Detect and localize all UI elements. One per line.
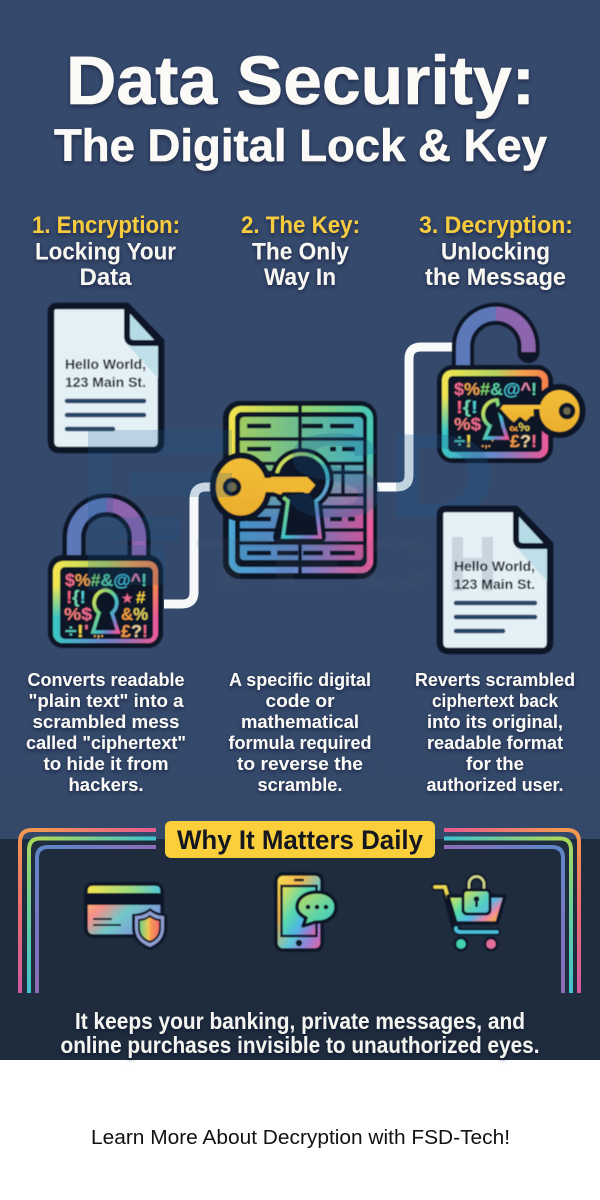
- watermark: FSD-Tech logo: [88, 409, 497, 606]
- ciphertext symbols: [64, 570, 148, 641]
- arrow: connector lock to key: [164, 487, 215, 604]
- key: [262, 475, 318, 497]
- text block: decryption description: readable format: [427, 733, 563, 753]
- panel: why it matters daily: [0, 839, 600, 1060]
- text block: decryption description: into its original,: [427, 712, 563, 732]
- ciphertext symbols: #: [136, 588, 146, 607]
- text block: key description: [228, 670, 372, 795]
- ciphertext symbols: &%: [121, 604, 148, 624]
- text block: encryption description: hackers.: [68, 775, 144, 795]
- text block: why it matters summary: [60, 1008, 540, 1058]
- heading: step 1 encryption: 1. Encryption:: [32, 212, 180, 239]
- heading: step 3 decryption: 3. Decryption:: [419, 212, 573, 239]
- text block: decryption description: [415, 670, 575, 795]
- text block: key description: formula required: [228, 733, 372, 753]
- icon: credit card with shield: [86, 884, 167, 950]
- icon: restored plain text document: Hello World,: [454, 558, 535, 574]
- text block: decryption description: Reverts scrambled: [415, 670, 575, 690]
- heading: step 3 decryption: the Message: [425, 264, 566, 291]
- text block: key description: code or: [266, 691, 334, 711]
- ciphertext symbols: $%#&@^!: [454, 379, 537, 399]
- ciphertext symbols: $%#&@^!: [65, 570, 147, 590]
- ciphertext symbols: .,.': [481, 436, 494, 450]
- ciphertext symbols: ★: [121, 591, 134, 607]
- ciphertext symbols: ÷!': [65, 621, 89, 641]
- footer call to action: Learn More About Decryption with FSD-Tech!: [91, 1127, 510, 1149]
- rainbow frame: right rails: [444, 828, 579, 993]
- text block: key description: scramble.: [258, 775, 342, 795]
- text block: key description: A specific digital: [229, 670, 371, 690]
- ciphertext symbols: %$: [454, 414, 481, 434]
- ciphertext symbols: £?!: [121, 621, 148, 641]
- heading: step 1 encryption: Data: [79, 264, 132, 291]
- watermark: FSD-Tech logo: SD: [283, 409, 497, 543]
- heading: step 3 decryption: Unlocking: [441, 238, 550, 266]
- ciphertext symbols: %$: [64, 604, 92, 624]
- heading: step 2 the key: The Only: [252, 238, 350, 266]
- icon: shopping cart with lock: [435, 877, 505, 950]
- icon: plain text document: [51, 306, 161, 450]
- rainbow frame: left rails: [20, 828, 156, 993]
- text block: decryption description: ciphertext back: [432, 691, 559, 711]
- ciphertext symbols: &%: [509, 420, 530, 434]
- heading: step 2 the key: 2. The Key:: [241, 212, 360, 239]
- title: [54, 42, 547, 171]
- grid lines of scrambled data: [240, 401, 363, 579]
- ciphertext symbols: £?!: [510, 431, 537, 451]
- icon: cipher key panel: [213, 401, 377, 579]
- text block: encryption description: to hide it from: [44, 754, 168, 774]
- text block: key description: to reverse the: [237, 754, 363, 774]
- title: Data Security:: [66, 42, 535, 119]
- heading: step 1 encryption: [32, 212, 180, 291]
- ciphertext symbols: !{!: [66, 587, 86, 607]
- title: The Digital Lock & Key: [54, 120, 547, 171]
- icon: plain text document: 123 Main St.: [65, 374, 146, 390]
- heading: step 1 encryption: Locking Your: [35, 238, 176, 266]
- watermark: FSD-Tech logo: TEC: [195, 523, 435, 606]
- ciphertext symbols: [454, 379, 537, 451]
- icon: restored plain text document: 123 Main St.: [454, 576, 535, 592]
- icon: open padlock with key: [437, 314, 582, 463]
- text block: why it matters summary: online purchases invisible to unauthorized eyes.: [60, 1032, 540, 1058]
- heading: step 2 the key: [241, 212, 360, 291]
- text block: why it matters summary: It keeps your banking, private messages, and: [75, 1008, 525, 1034]
- text block: encryption description: [26, 670, 186, 795]
- ciphertext symbols: !{!: [456, 397, 478, 417]
- ciphertext symbols: .,.': [93, 625, 107, 640]
- heading: step 3 decryption: [419, 212, 573, 291]
- icon: phone with chat bubble: [276, 874, 336, 950]
- key: [498, 403, 545, 425]
- keyhole: [93, 590, 118, 632]
- text block: decryption description: authorized user.: [426, 775, 564, 795]
- text block: encryption description: called "ciphertext": [26, 733, 186, 753]
- text block: encryption description: "plain text" into a: [28, 691, 185, 711]
- heading badge: why it matters daily: Why It Matters Daily: [177, 825, 423, 855]
- text block: key description: mathematical: [241, 712, 359, 732]
- ciphertext symbols: ÷!: [454, 431, 472, 451]
- keyhole: [276, 454, 328, 537]
- text block: encryption description: scrambled mess: [32, 712, 180, 732]
- heading: step 2 the key: Way In: [264, 264, 336, 291]
- icon: closed padlock with ciphertext: [48, 505, 163, 648]
- text block: decryption description: for the: [466, 754, 524, 774]
- icon: restored plain text document: [440, 509, 550, 651]
- text block: encryption description: Converts readable: [28, 670, 184, 690]
- icon: plain text document: Hello World,: [65, 356, 146, 372]
- keyhole: [483, 400, 507, 438]
- arrow: connector key to open lock: [377, 347, 456, 487]
